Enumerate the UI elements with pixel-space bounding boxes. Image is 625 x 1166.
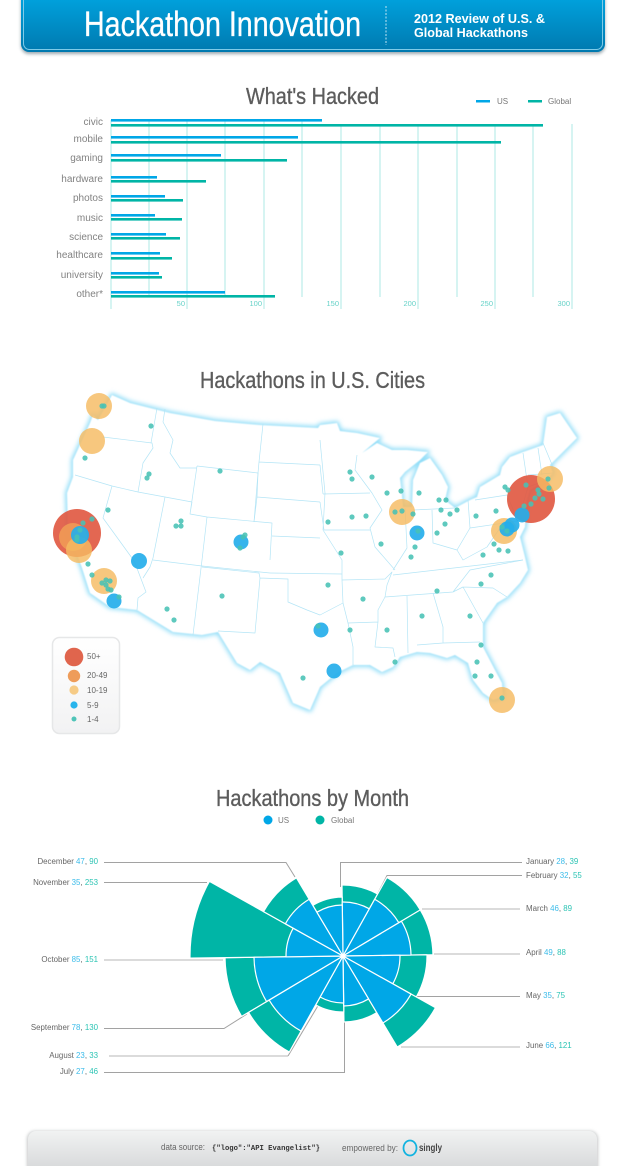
bars: hardware [111, 176, 206, 183]
axis labels: 250 [480, 299, 493, 308]
map legend: 20-49 [87, 671, 108, 680]
category labels: civic [84, 117, 103, 128]
category labels [56, 117, 103, 300]
month labels: right [526, 857, 582, 1050]
data source [161, 1142, 320, 1153]
month labels: left [31, 857, 99, 1076]
map legend [52, 638, 120, 734]
bar chart: what's hacked [56, 117, 572, 309]
bars: music [111, 214, 182, 221]
map legend: 50+ [87, 652, 101, 661]
month labels: right: March 46, 89 [526, 904, 573, 913]
category labels: mobile [74, 134, 103, 145]
category labels: university [61, 270, 103, 281]
axis labels: 300 [557, 299, 570, 308]
subtitle: Global Hackathons [414, 25, 528, 40]
month labels: left: September 78, 130 [31, 1023, 99, 1032]
legend: by month [264, 816, 354, 825]
rose chart: hackathons by month [189, 870, 445, 1057]
month labels: right: February 32, 55 [526, 871, 582, 880]
legend: What's Hacked: US [497, 97, 508, 106]
data source: {"logo":"API Evangelist"} [212, 1145, 320, 1153]
subtitle [414, 11, 545, 40]
west coast clusters [53, 393, 147, 608]
legend: by month: US [278, 816, 289, 825]
category labels: hardware [61, 174, 103, 185]
global wedges [189, 870, 445, 1057]
empowered by singly: singly [419, 1143, 442, 1154]
central and eastern clusters [234, 466, 563, 713]
axis labels: 50 [177, 299, 185, 308]
US wedges [243, 893, 420, 1032]
month labels: left: October 85, 151 [41, 955, 98, 964]
month labels: left: August 23, 33 [49, 1051, 99, 1060]
title: Hackathon Innovation [84, 5, 361, 44]
leader lines [104, 862, 522, 1072]
heading: What's Hacked: What's Hacked [246, 83, 379, 109]
empowered by singly [342, 1140, 442, 1156]
subtitle: 2012 Review of U.S. & [414, 11, 545, 26]
category labels: healthcare [56, 250, 103, 261]
footer [27, 1131, 598, 1166]
bars: healthcare [111, 252, 172, 260]
bars: photos [111, 195, 183, 202]
category labels: other* [76, 289, 103, 300]
category labels: music [77, 213, 103, 224]
map of U.S. [67, 395, 577, 710]
header banner [21, 0, 605, 54]
axis labels [177, 299, 570, 308]
small city dots [74, 403, 552, 701]
axis labels: 200 [403, 299, 416, 308]
bars: mobile [111, 136, 501, 144]
category labels: gaming [70, 153, 103, 164]
bars: other [111, 291, 275, 298]
axis labels: 100 [249, 299, 262, 308]
heading: Hackathons in U.S. Cities: Hackathons in U.S. Cities [200, 367, 425, 393]
month labels: right: May 35, 75 [526, 991, 566, 1000]
category labels: photos [73, 193, 103, 204]
empowered by singly: empowered by: [342, 1143, 398, 1153]
map legend: 1-4 [87, 715, 99, 724]
axis labels: 150 [326, 299, 339, 308]
category labels: science [69, 232, 103, 243]
bars: civic [111, 119, 543, 127]
data source: data source: [161, 1142, 205, 1152]
month labels: right: June 66, 121 [526, 1041, 572, 1050]
month labels: left: November 35, 253 [33, 878, 99, 887]
map legend: 10-19 [87, 686, 108, 695]
legend: What's Hacked: Global [548, 97, 571, 106]
month labels: right: April 49, 88 [526, 948, 567, 957]
heading: Hackathons by Month: Hackathons by Month [216, 785, 409, 811]
map legend: 5-9 [87, 701, 99, 710]
legend: What's Hacked [476, 97, 571, 106]
bars: gaming [111, 154, 287, 162]
month labels: left: July 27, 46 [60, 1067, 99, 1076]
month labels: left: December 47, 90 [37, 857, 99, 866]
legend: by month: Global [331, 816, 354, 825]
bars: science [111, 233, 180, 240]
month labels: right: January 28, 39 [526, 857, 579, 866]
map markers: hackathon counts by city [53, 393, 563, 713]
bars: university [111, 272, 162, 279]
